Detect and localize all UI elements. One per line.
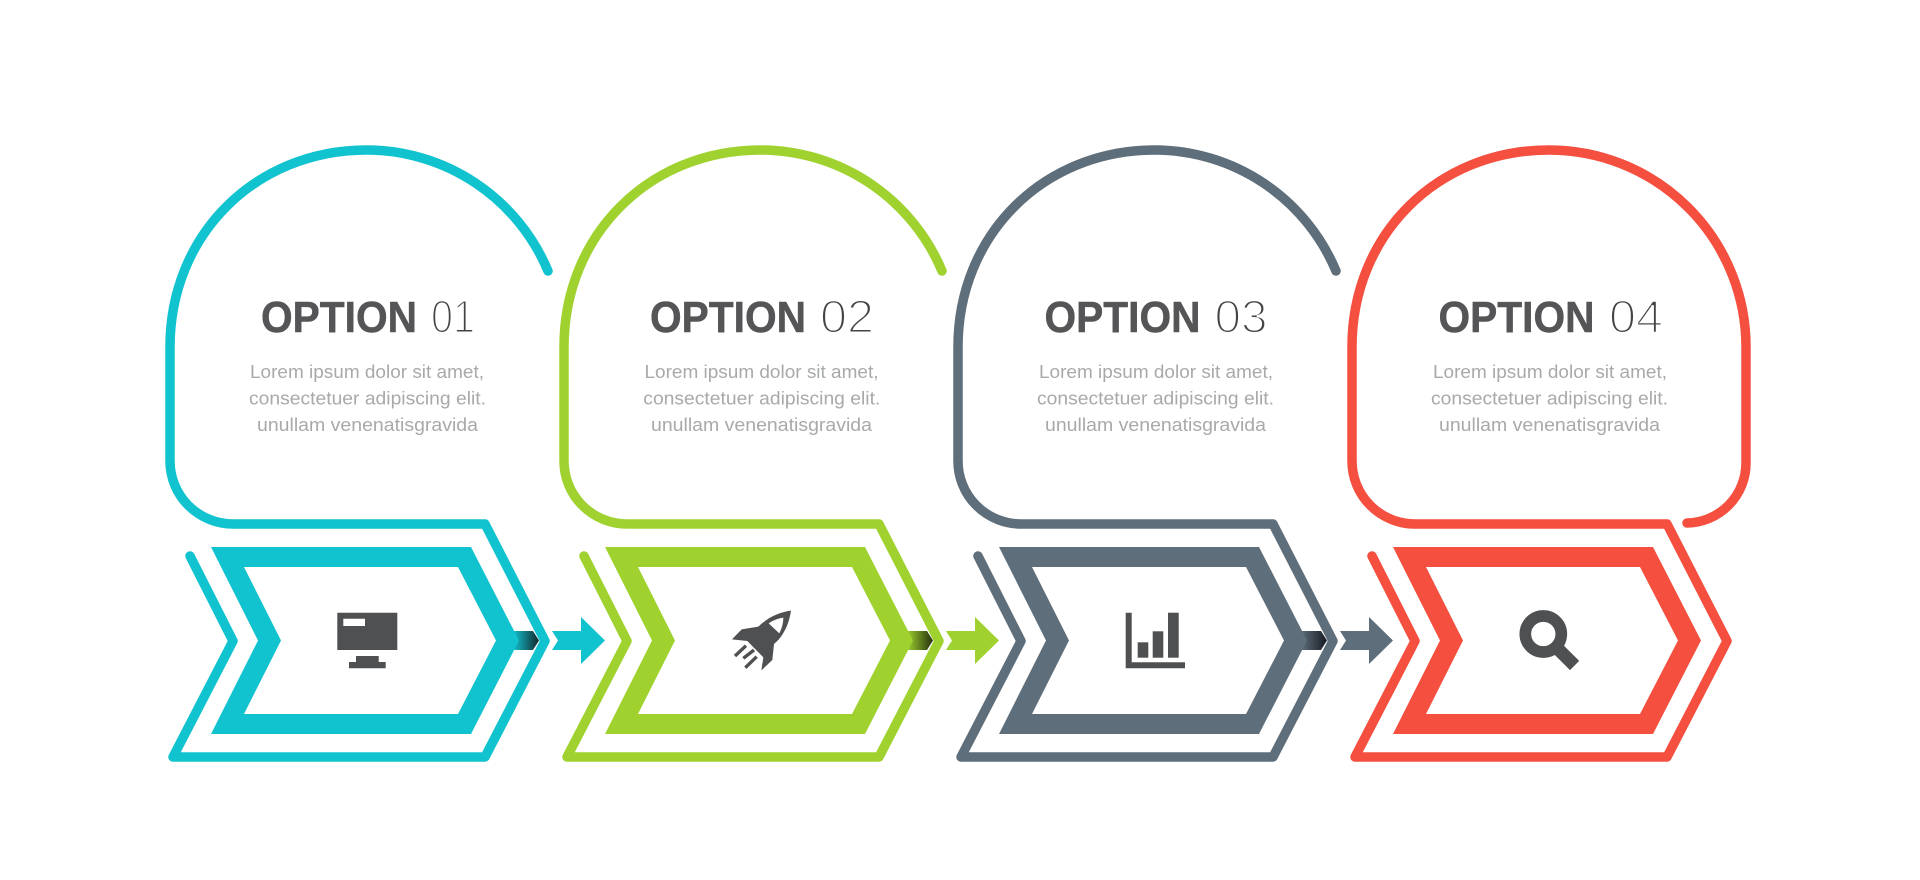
body text: option 03: Lorem ipsum dolor sit amet, xyxy=(1039,362,1273,382)
chevron: option 03 xyxy=(999,547,1307,734)
heading: option 04: OPTION xyxy=(1438,293,1594,342)
body text: option 03: consectetuer adipiscing elit. xyxy=(1037,388,1274,408)
panel: option 03 xyxy=(958,150,1393,757)
arrow: option 02 to 03 xyxy=(946,617,999,664)
heading: option 03: OPTION xyxy=(1044,293,1200,342)
icon: monitor xyxy=(337,613,397,668)
number: 04: 04 xyxy=(1609,290,1663,342)
connector shadow: option 02 xyxy=(902,631,933,650)
arrow: option 01 to 02 xyxy=(552,617,605,664)
chevron: option 01 xyxy=(211,547,519,734)
body text: option 04: consectetuer adipiscing elit. xyxy=(1431,388,1668,408)
body text: option 04: Lorem ipsum dolor sit amet, xyxy=(1433,362,1667,382)
body text: option 01 xyxy=(249,362,486,435)
body text: option 02: Lorem ipsum dolor sit amet, xyxy=(644,362,878,382)
body text: option 01: consectetuer adipiscing elit. xyxy=(249,388,486,408)
outline: option 01 xyxy=(170,150,548,757)
body text: option 04 xyxy=(1431,362,1668,435)
body text: option 03 xyxy=(1037,362,1274,435)
arrow: option 03 to 04 xyxy=(1340,617,1393,664)
outline: option 03 xyxy=(958,150,1336,757)
body text: option 02 xyxy=(643,362,880,435)
body text: option 01: unullam venenatisgravida xyxy=(257,415,479,435)
heading: option 02: OPTION xyxy=(650,293,806,342)
body text: option 02: unullam venenatisgravida xyxy=(651,415,873,435)
connector shadow: option 03 xyxy=(1296,631,1327,650)
panel: option 04 xyxy=(1352,150,1746,757)
chevron: option 02 xyxy=(605,547,913,734)
icon: bar chart xyxy=(1126,613,1185,668)
number: 01: 01 xyxy=(431,290,475,342)
icon: rocket xyxy=(732,611,791,670)
outline: option 02 xyxy=(564,150,942,757)
body text: option 03: unullam venenatisgravida xyxy=(1045,415,1267,435)
number: 03: 03 xyxy=(1214,290,1268,342)
outline: option 04 xyxy=(1352,150,1746,757)
heading: option 01: OPTION xyxy=(261,293,417,342)
body text: option 04: unullam venenatisgravida xyxy=(1439,415,1661,435)
chevron: option 04 xyxy=(1393,547,1701,734)
panel: option 01 xyxy=(170,150,605,757)
panel: option 02 xyxy=(564,150,999,757)
body text: option 01: Lorem ipsum dolor sit amet, xyxy=(250,362,484,382)
icon: magnifier xyxy=(1525,616,1575,666)
body text: option 02: consectetuer adipiscing elit. xyxy=(643,388,880,408)
connector shadow: option 01 xyxy=(508,631,539,650)
number: 02: 02 xyxy=(820,290,874,342)
